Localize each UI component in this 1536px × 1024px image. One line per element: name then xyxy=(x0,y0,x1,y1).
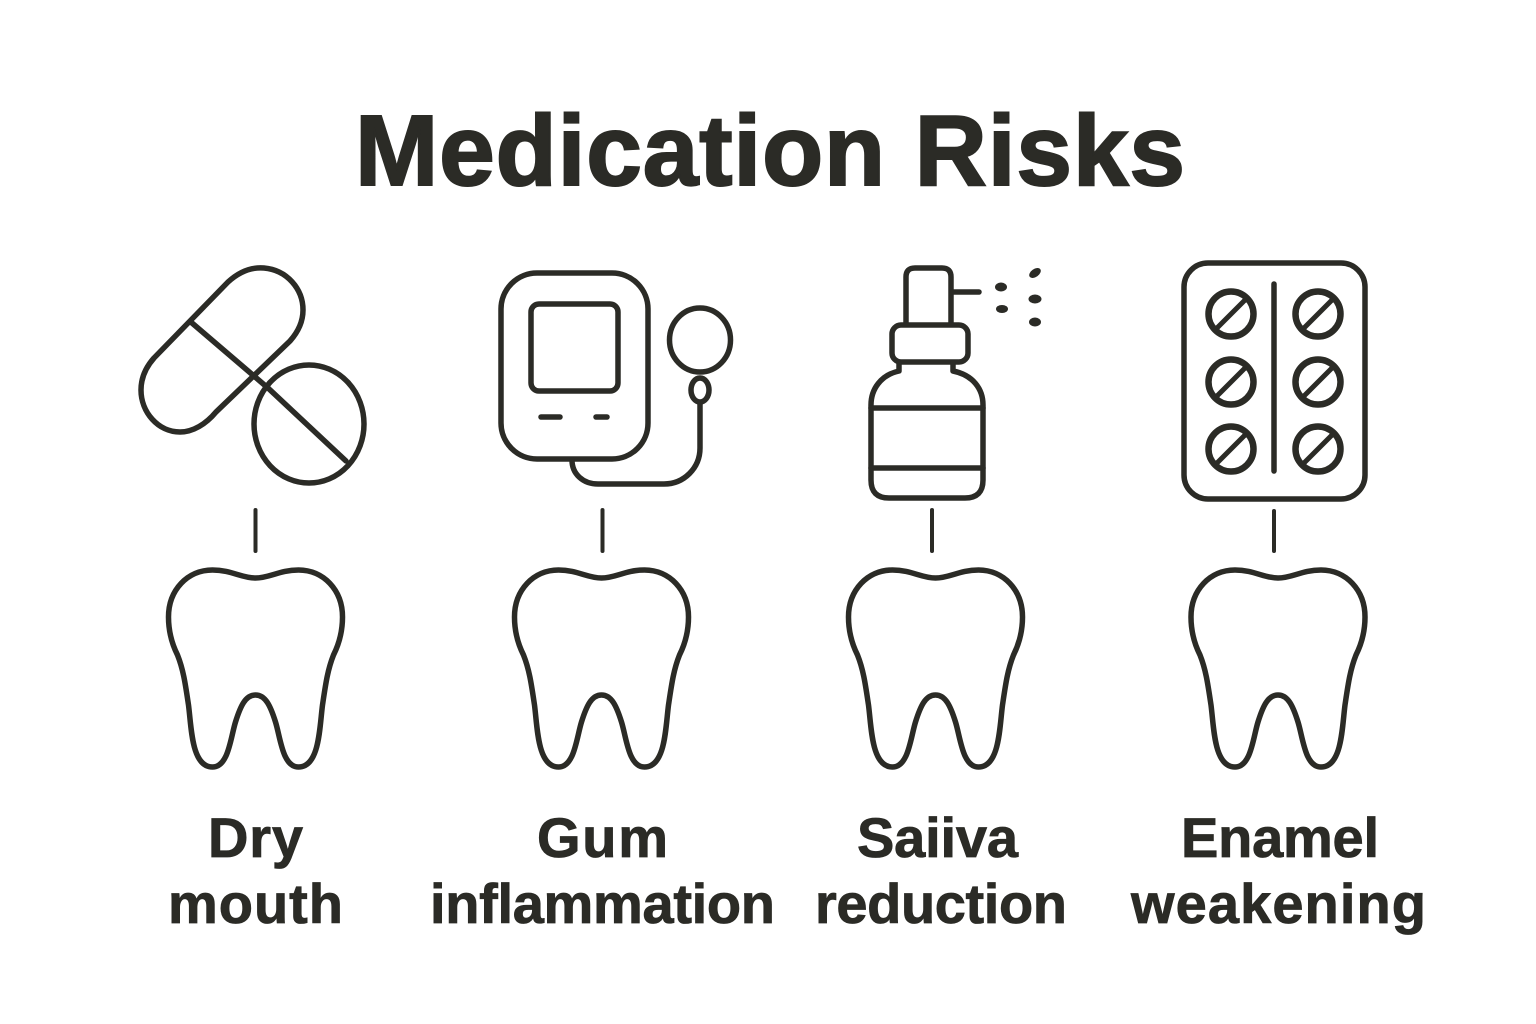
icon: capsule and tablet xyxy=(141,268,364,483)
label: saliva reduction: reduction xyxy=(815,872,1067,935)
connector line xyxy=(930,510,934,551)
icon: blister pack xyxy=(1184,263,1365,499)
label: gum inflammation xyxy=(430,806,775,935)
label: dry mouth: Dry xyxy=(208,806,303,869)
title: Medication Risks xyxy=(355,95,1185,207)
icon: spray bottle xyxy=(871,266,1043,498)
icon: blood pressure monitor xyxy=(501,273,730,484)
panel: saliva reduction xyxy=(815,266,1067,935)
label: gum inflammation: inflammation xyxy=(430,872,775,935)
icon: tooth xyxy=(848,570,1022,767)
panel: dry mouth xyxy=(141,268,364,935)
icon: tooth xyxy=(1191,570,1365,767)
label: dry mouth xyxy=(168,806,343,935)
label: dry mouth: mouth xyxy=(168,872,343,935)
icon: tooth xyxy=(168,570,342,767)
label: saliva reduction xyxy=(815,806,1067,935)
label: saliva reduction: Saiiva xyxy=(857,806,1019,869)
panel: gum inflammation xyxy=(430,273,775,935)
label: gum inflammation: Gum xyxy=(537,806,668,869)
icon: tooth xyxy=(514,570,688,767)
connector line xyxy=(254,510,258,551)
label: enamel weakening xyxy=(1130,806,1426,935)
panel: enamel weakening xyxy=(1130,263,1426,935)
connector line xyxy=(600,510,604,551)
label: enamel weakening: Enamel xyxy=(1181,806,1379,869)
connector line xyxy=(1272,511,1276,551)
label: enamel weakening: weakening xyxy=(1130,872,1426,935)
